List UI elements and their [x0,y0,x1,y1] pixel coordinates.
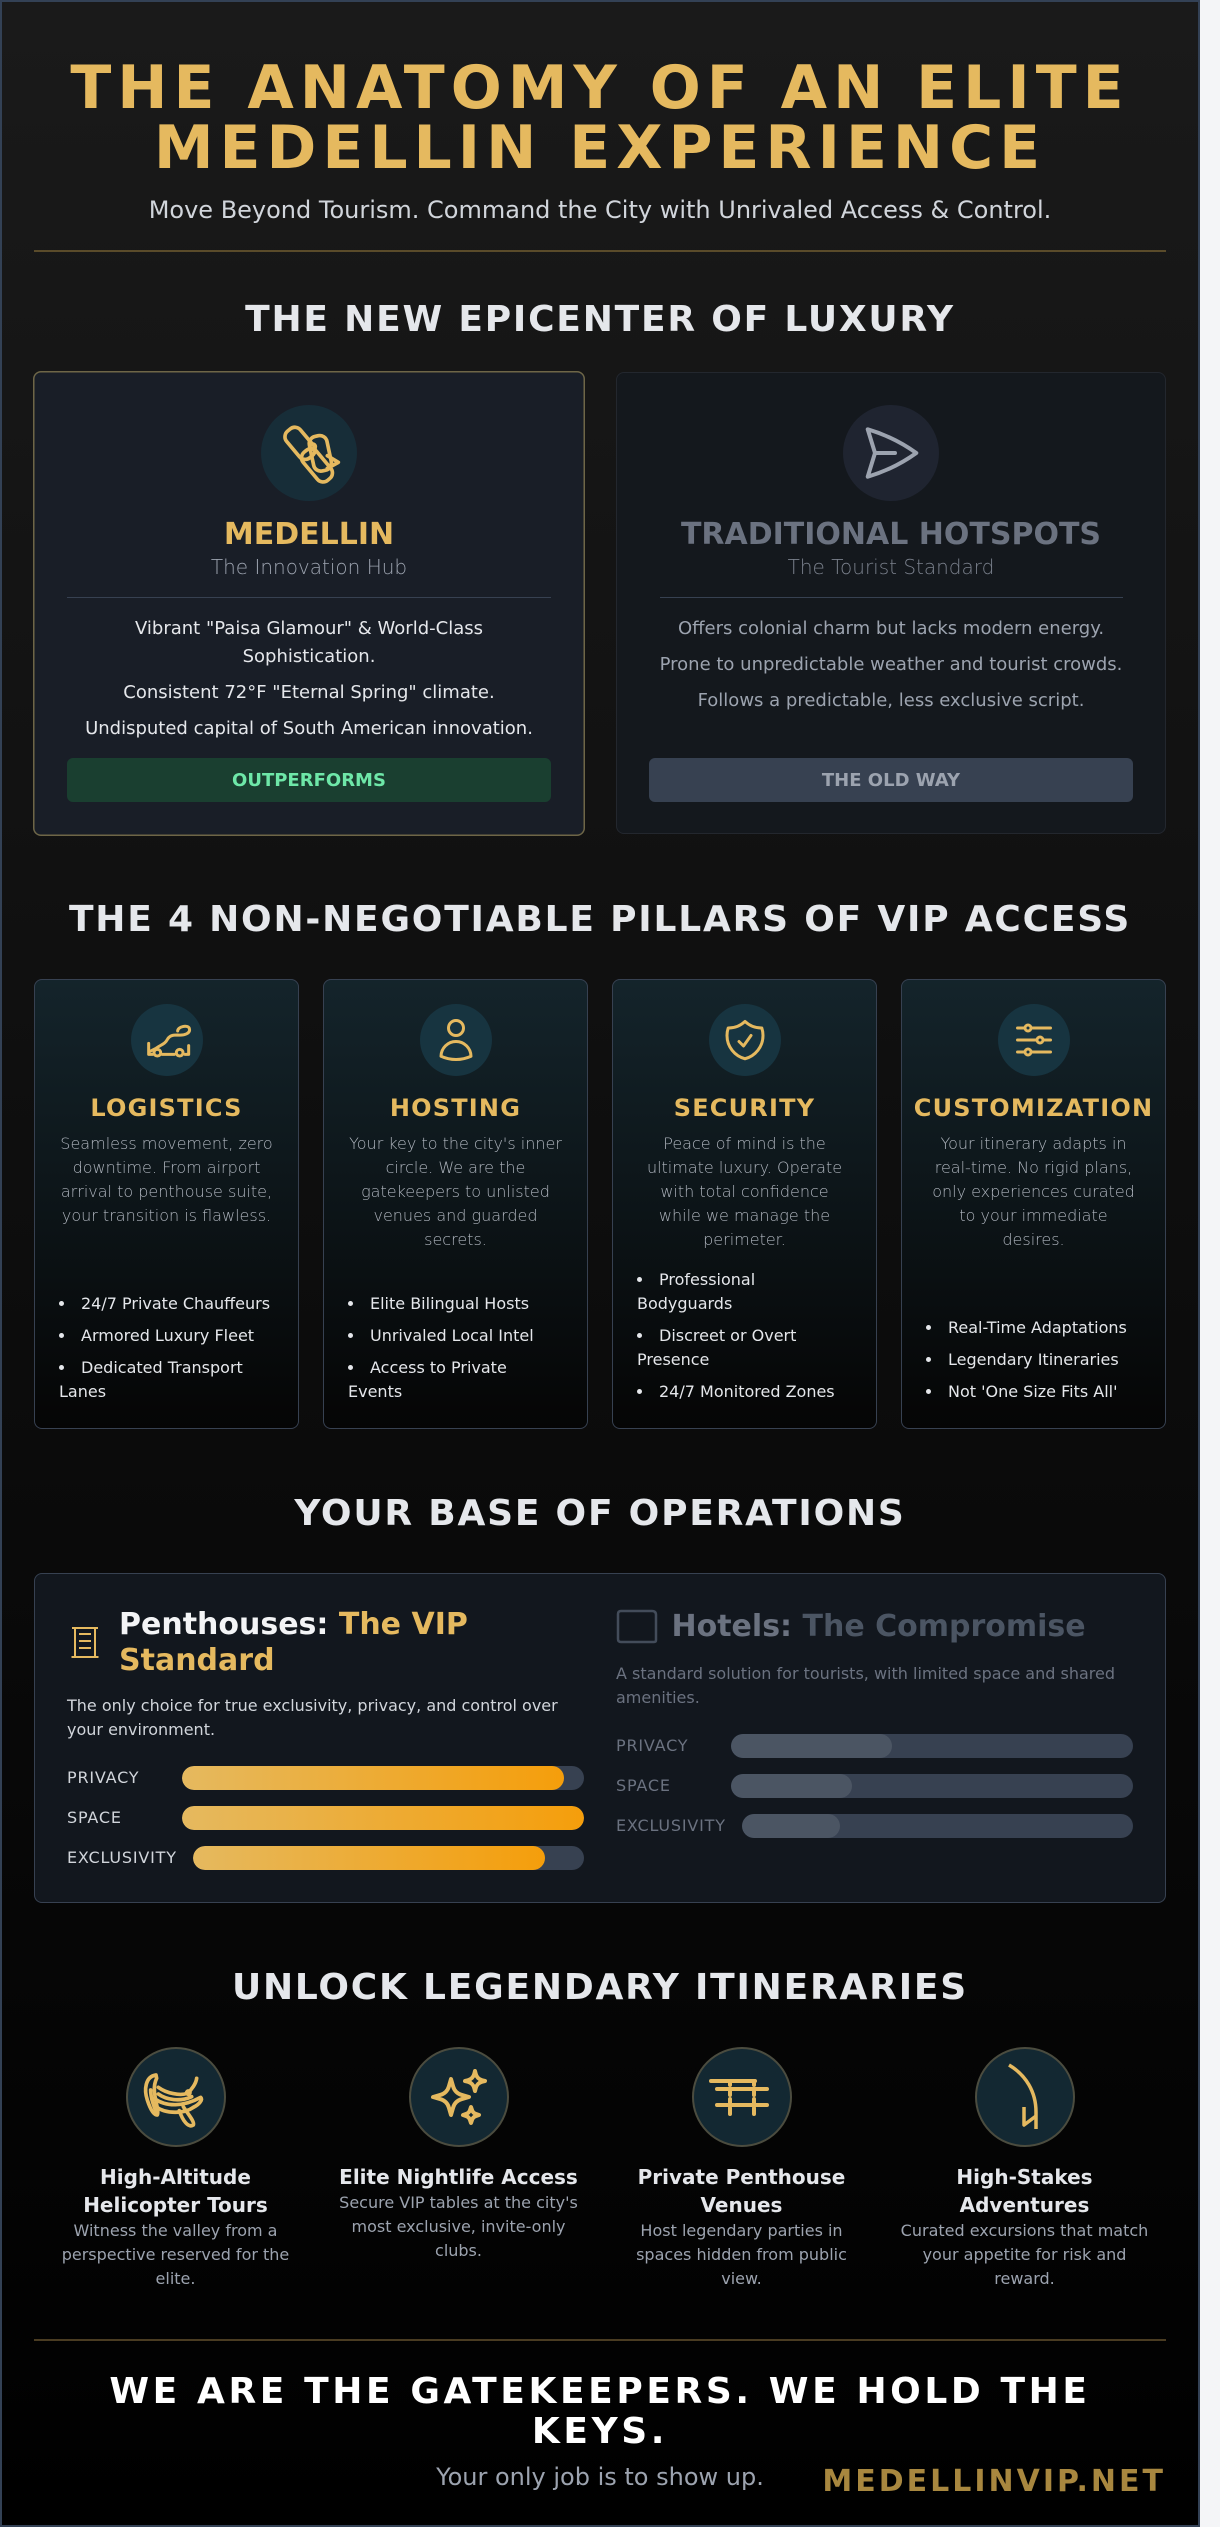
description: customization: desires. [1002,1230,1065,1249]
bar: space 100% [182,1806,584,1830]
description: logistics: Seamless movement, zero [60,1134,273,1153]
label: exclusivity: EXCLUSIVITY [67,1848,177,1867]
heading: penthouse venues: Private Penthouse [638,2165,845,2189]
list: hosting: Events [348,1382,402,1401]
heading: itineraries: UNLOCK LEGENDARY ITINERARIES [232,1966,968,2008]
heading: logistics: LOGISTICS [90,1094,243,1122]
list: security: Discreet or Overt [659,1326,796,1345]
icon: hook [975,2047,1075,2147]
panel: security [612,979,877,1429]
footer headline [109,2371,1091,2452]
list: customization: Legendary Itineraries [948,1350,1119,1369]
text: traditional drawbacks: Prone to unpredictable weather and tourist crowds. [660,654,1122,675]
description: logistics: downtime. From airport [73,1158,260,1177]
description: security: with total confidence [660,1182,829,1201]
heading: hosting: HOSTING [390,1094,521,1122]
description: customization: real-time. No rigid plans, [935,1158,1132,1177]
description: security: ultimate luxury. Operate [647,1158,842,1177]
description: hosting: venues and guarded [373,1206,538,1225]
footer headline: KEYS. [532,2411,668,2452]
panel: base comparison [34,1573,1166,1903]
description: helicopter tours: Witness the valley from a [74,2221,277,2240]
description: adventures [901,2221,1148,2288]
label: privacy: PRIVACY [67,1768,139,1787]
description: nightlife access: most exclusive, invite-only [352,2217,566,2236]
icon: shield [708,1004,780,1076]
list: logistics: Lanes [59,1382,106,1401]
description: nightlife access [339,2193,578,2260]
heading: nightlife access: Elite Nightlife Access [339,2165,578,2189]
text: hotels: amenities. [616,1688,700,1707]
text: penthouses: your environment. [67,1720,215,1739]
panel: Medellin [33,371,585,836]
footer logo: MEDELLINVIP.NET [822,2464,1166,2499]
bar: exclusivity 90% [193,1846,584,1870]
text: Medellin benefits: Vibrant "Paisa Glamour" & World-Class [135,618,483,639]
icon: car [130,1004,202,1076]
text: traditional drawbacks: Offers colonial charm but lacks modern energy. [678,618,1104,639]
list: security [637,1270,835,1401]
description: security [647,1134,842,1249]
text: penthouses: The only choice for true exclusivity, privacy, and control over [67,1696,558,1715]
description: customization: Your itinerary adapts in [940,1134,1127,1153]
list: customization [926,1318,1127,1401]
badge: the old way [649,758,1133,802]
list: logistics: Armored Luxury Fleet [81,1326,254,1345]
description: security: Peace of mind is the [663,1134,826,1153]
description: customization: to your immediate [959,1206,1108,1225]
heading: new epicenter: THE NEW EPICENTER OF LUXURY [245,299,955,340]
item: helicopter tours [62,2047,289,2288]
description: adventures: your appetite for risk and [923,2245,1126,2264]
description: logistics: arrival to penthouse suite, [61,1182,272,1201]
description: hosting: circle. We are the [386,1158,525,1177]
heading: penthouse venues [638,2165,845,2217]
description: penthouse venues [636,2221,847,2288]
heading: traditional hotspots: TRADITIONAL HOTSPOTS [681,517,1101,552]
description: penthouse venues: spaces hidden from public [636,2245,847,2264]
text: hotels: A standard solution for tourists, with limited space and shared [616,1664,1115,1683]
label: space: SPACE [67,1808,122,1827]
description: helicopter tours: elite. [156,2269,195,2288]
panel: logistics [34,979,299,1429]
label: exclusivity: EXCLUSIVITY [616,1816,726,1835]
text: penthouses [66,1696,558,1739]
footer headline: WE ARE THE GATEKEEPERS. WE HOLD THE [109,2371,1091,2412]
text: Medellin benefits: Undisputed capital of South American innovation. [85,718,533,739]
title: THE ANATOMY OF AN ELITE [70,53,1130,123]
subheading: tourist standard: The Tourist Standard [788,555,994,579]
list: hosting: Elite Bilingual Hosts [370,1294,529,1313]
list: logistics: Dedicated Transport [81,1358,243,1377]
item: penthouse venues [636,2047,847,2288]
list: hosting [348,1294,534,1401]
heading: penthouses: Standard [119,1643,275,1678]
subtitle: Move Beyond Tourism. Command the City with Unrivaled Access & Control. [149,196,1051,224]
list: security: 24/7 Monitored Zones [659,1382,835,1401]
list: logistics [59,1294,270,1401]
label: space: SPACE [616,1776,671,1795]
text: hotels [616,1664,1115,1707]
description: helicopter tours: perspective reserved for the [62,2245,289,2264]
list: logistics: 24/7 Private Chauffeurs [81,1294,270,1313]
icon: venue [692,2047,792,2147]
bar: exclusivity 25% [742,1814,1133,1838]
item: adventures [901,2047,1148,2288]
title [70,53,1130,183]
icon: building [72,1627,98,1658]
icon: hotel box [616,1610,658,1644]
panel: hosting [323,979,588,1429]
footer subline: Your only job is to show up. [436,2463,764,2491]
badge: the old way: THE OLD WAY [822,770,960,791]
description: nightlife access: clubs. [435,2241,482,2260]
description: hosting: secrets. [424,1230,487,1249]
item: nightlife access [339,2047,578,2260]
list: hosting: Access to Private [370,1358,507,1377]
heading: security: SECURITY [674,1094,815,1122]
description: adventures: reward. [994,2269,1055,2288]
badge: outperforms: OUTPERFORMS [232,770,386,791]
description: security: perimeter. [703,1230,786,1249]
heading: adventures [956,2165,1093,2217]
description: hosting [349,1134,562,1249]
description: customization [932,1134,1135,1249]
panel: customization [901,979,1166,1429]
subheading: innovation hub: The Innovation Hub [211,555,407,579]
heading: base of operations: YOUR BASE OF OPERATIONS [294,1492,906,1534]
description: hosting: gatekeepers to unlisted [361,1182,550,1201]
icon: person [420,1004,492,1076]
list: hosting: Unrivaled Local Intel [370,1326,534,1345]
description: adventures: Curated excursions that match [901,2221,1148,2240]
text: traditional drawbacks [660,618,1122,711]
heading: hotels: Hotels: The Compromise [672,1609,1086,1644]
label: privacy: PRIVACY [616,1736,688,1755]
description: security: while we manage the [659,1206,830,1225]
heading: adventures: High-Stakes [956,2165,1093,2189]
bar: space 30% [731,1774,1133,1798]
heading: helicopter tours: High-Altitude [100,2165,251,2189]
panel: traditional hotspots [616,372,1166,834]
description: hosting: Your key to the city's inner [349,1134,562,1153]
list: security: Professional [659,1270,755,1289]
icon: links [261,405,357,501]
heading: pillars: THE 4 NON-NEGOTIABLE PILLARS OF VIP ACCESS [69,898,1131,940]
list: security: Bodyguards [637,1294,732,1313]
description: logistics: your transition is flawless. [62,1206,271,1225]
badge: outperforms [67,758,551,802]
heading: adventures: Adventures [960,2193,1089,2217]
description: logistics [60,1134,273,1225]
text: Medellin benefits [85,618,533,739]
description: helicopter tours [62,2221,289,2288]
description: customization: only experiences curated [932,1182,1135,1201]
title: MEDELLIN EXPERIENCE [154,113,1046,183]
description: penthouse venues: view. [721,2269,762,2288]
heading: Medellin: MEDELLIN [224,517,394,552]
icon: sparkles [409,2047,509,2147]
bar: privacy 95% [182,1766,584,1790]
icon: sliders [998,1004,1070,1076]
text: Medellin benefits: Consistent 72°F "Eternal Spring" climate. [123,682,495,703]
description: nightlife access: Secure VIP tables at the city's [339,2193,578,2212]
icon: paper plane [843,405,939,501]
list: customization: Real-Time Adaptations [948,1318,1127,1337]
list: customization: Not 'One Size Fits All' [948,1382,1118,1401]
bar: privacy 40% [731,1734,1133,1758]
description: penthouse venues: Host legendary parties in [640,2221,843,2240]
heading: helicopter tours [83,2165,268,2217]
heading: penthouses [119,1607,468,1678]
list: security: Presence [637,1350,709,1369]
heading: helicopter tours: Helicopter Tours [83,2193,268,2217]
icon: helicopter [126,2047,226,2147]
heading: penthouses: Penthouses: The VIP [119,1607,468,1642]
text: Medellin benefits: Sophistication. [243,646,375,667]
heading: penthouse venues: Venues [701,2193,782,2217]
text: traditional drawbacks: Follows a predictable, less exclusive script. [698,690,1084,711]
heading: customization: CUSTOMIZATION [914,1094,1153,1122]
